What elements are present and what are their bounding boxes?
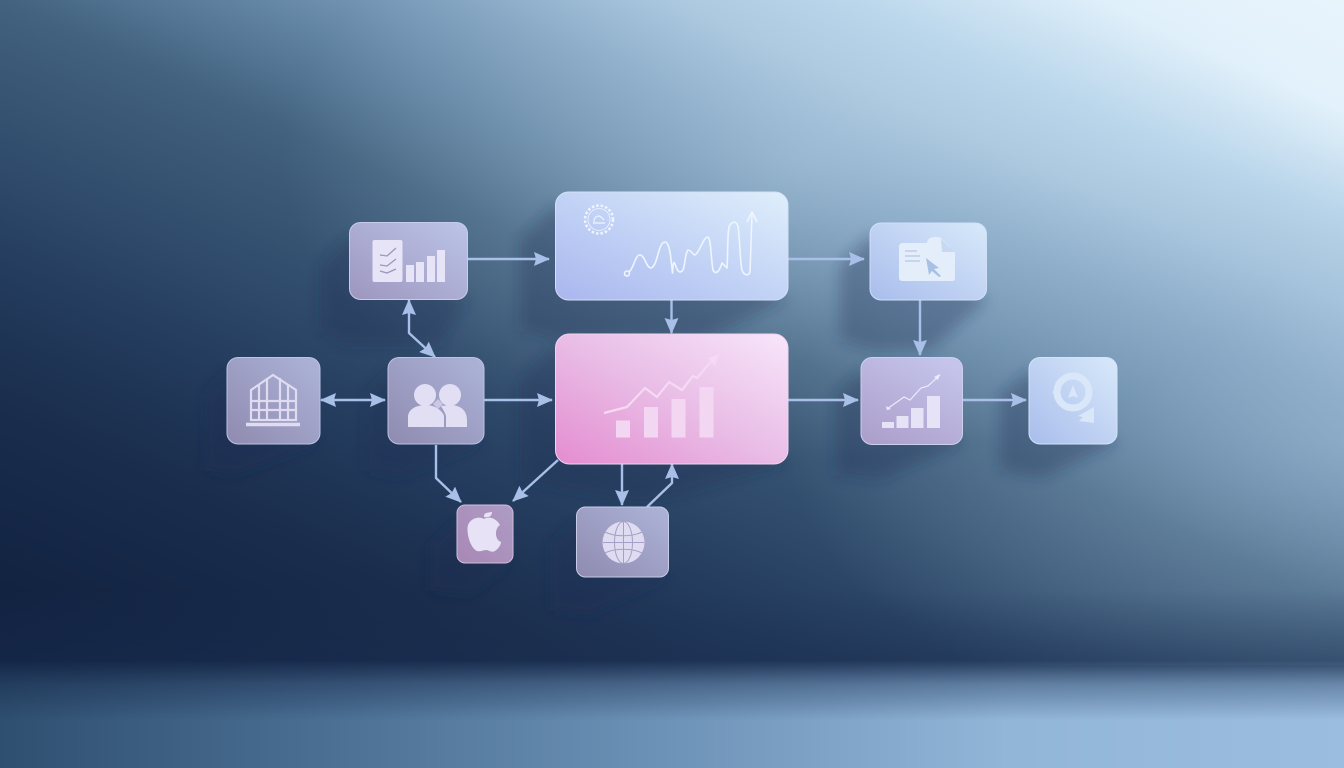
icon: gear — [585, 206, 613, 234]
arrow: people to apple — [436, 445, 461, 502]
panel: growth tile — [861, 358, 962, 444]
arrow: globe to growth panel — [647, 464, 672, 507]
icon: people — [408, 384, 467, 427]
icon: apple — [467, 512, 501, 552]
icon: globe — [602, 522, 644, 564]
icon: compass — [1052, 376, 1094, 423]
icon: small growth chart — [882, 374, 940, 428]
panel: document — [870, 223, 986, 300]
arrow: building and people, two way — [321, 399, 385, 401]
panel: report — [350, 222, 468, 300]
arrow: growth panel to apple — [513, 460, 558, 501]
panel: globe tile — [576, 507, 668, 577]
icon: checklist and bars — [372, 240, 445, 282]
arrow: trend panel to growth panel — [670, 300, 673, 333]
arrow: people to growth panel — [484, 399, 552, 401]
panel: trend line — [556, 192, 788, 300]
chart: bars with rising line — [604, 354, 719, 438]
arrow: growth panel to globe — [621, 464, 623, 505]
arrow: people to report, two way — [409, 300, 435, 357]
arrow: growth panel to growth tile — [788, 399, 858, 401]
arrows — [321, 259, 1026, 507]
arrow: growth tile to compass tile — [963, 399, 1026, 401]
panel: apple tile — [457, 505, 513, 563]
panel: growth chart — [556, 334, 788, 464]
panel shadows — [205, 205, 1117, 615]
panel: people — [388, 358, 484, 444]
arrow: trend panel to document — [788, 258, 864, 260]
chart: trend line — [624, 212, 757, 276]
arrow: report to trend panel — [468, 258, 549, 260]
icon: document with cursor — [899, 237, 955, 281]
panel: building — [227, 358, 320, 444]
icon: building — [246, 375, 300, 424]
arrow: document to growth tile — [919, 300, 921, 355]
panel: compass tile — [1029, 358, 1117, 444]
